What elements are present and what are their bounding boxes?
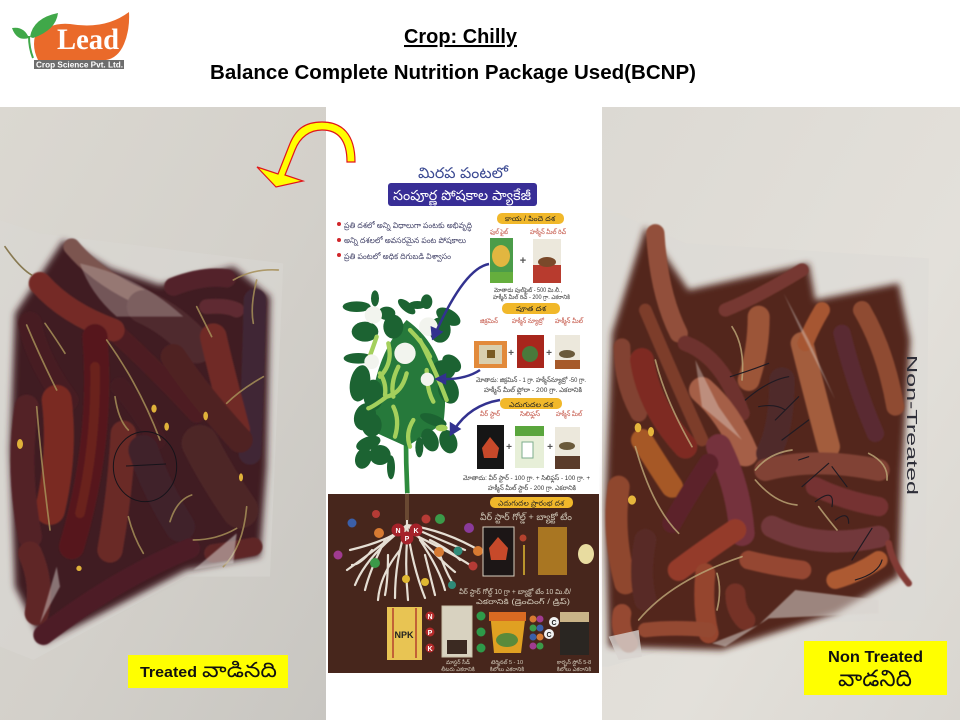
orange-red chilly pile xyxy=(605,227,919,660)
stage: vegetative products: సిలిఫ్లస్ xyxy=(520,410,540,419)
bullet list xyxy=(337,221,472,262)
infographic banner: సంపూర్ణ పోషకాల ప్యాకేజీ xyxy=(393,187,531,206)
infographic banner xyxy=(388,183,537,206)
stage: vegetative products xyxy=(463,398,590,493)
fertiliser products xyxy=(442,606,472,657)
stage: vegetative products: వీర్ స్టార్ xyxy=(480,410,500,419)
chilli plant illustration xyxy=(343,290,465,493)
stage: vegetative products: హక్మీన్ మీల్ xyxy=(556,410,583,419)
marker scribble xyxy=(730,363,882,580)
stage: flowering products: హక్మీన్ మీల్ xyxy=(555,317,584,326)
panel: treated chilly photo xyxy=(0,107,326,720)
stage: flowering products: పూత దశ xyxy=(516,305,547,313)
subtitle: Balance Complete Nutrition Package Used(BCNP) xyxy=(210,62,696,84)
product captions: కిలోలు ఎకరానికి xyxy=(490,666,524,673)
infographic heading: మిరప పంటలో xyxy=(418,164,510,182)
logo: Lead Crop Science xyxy=(12,12,129,70)
stage: flowering products: + xyxy=(546,348,552,359)
label: non treated: Non Treated xyxy=(828,649,923,666)
panel: nutrition package infographic xyxy=(328,162,599,674)
stems xyxy=(635,327,887,620)
soil section: ఎదుగుదల ప్రారంభ దశ xyxy=(498,500,565,508)
stage: fruiting products: ఫుల్ ఫైట్ xyxy=(490,228,509,237)
logo: Lead Crop Science: Crop Science Pvt. Ltd. xyxy=(36,60,123,70)
bullet list: అన్ని దశలలో అవసరమైన పంట పోషకాలు xyxy=(344,236,466,246)
bag print strip xyxy=(712,590,879,647)
stems xyxy=(5,247,278,567)
soil section: C xyxy=(546,632,552,639)
plastic glare xyxy=(695,360,742,440)
stage: fruiting products: హక్మీన్ మీల్ రిచ్ xyxy=(530,228,566,237)
root products xyxy=(483,527,514,576)
label: non treated xyxy=(804,641,947,695)
logo: Lead Crop Science: Lead xyxy=(57,23,119,56)
soil section: K xyxy=(427,646,433,653)
nutrient balls: P xyxy=(405,536,410,543)
stage: flowering products xyxy=(474,303,586,395)
handwritten Non Treated note: Non-Treated xyxy=(903,355,919,495)
stage: vegetative products: + xyxy=(547,442,553,453)
label: treated xyxy=(128,655,288,688)
bullet list: ప్రతి దశలో అన్ని విధాలుగా పంటకు అభివృద్ధి xyxy=(344,221,472,232)
stage: fruiting products: హక్మీన్ మీల్ రిచ్ - 200 గ్రా. ఎకరానికి xyxy=(493,293,570,302)
label: treated: వాడినది xyxy=(202,659,277,682)
dark chilly pile xyxy=(5,240,278,643)
plastic bag xyxy=(602,207,929,667)
stage: flowering products: హక్మీన్ న్యూట్రో xyxy=(512,317,545,326)
soil section: ఎకరానికి (డ్రెంచింగ్ / డ్రిప్) xyxy=(476,598,570,606)
plastic bag xyxy=(0,220,283,660)
stage: fruiting products: కాయ / పిందె దశ xyxy=(505,215,556,223)
seeds xyxy=(17,405,243,571)
seeds xyxy=(628,423,654,505)
NPK bag: NPK xyxy=(394,630,414,640)
soil section: వీర్ స్టార్ గోల్డ్ + బ్యాక్టో టేం xyxy=(480,511,572,524)
product captions: కిలోలు ఎకరానికి xyxy=(557,666,591,673)
stage: fruiting products xyxy=(490,213,570,302)
marker circle xyxy=(113,432,177,502)
arrow: curved yellow arrow pointing to treated sample xyxy=(257,122,355,187)
soil section: వీర్ స్టార్ గోల్డ్ 10 గ్రా + బ్యాక్టో టేం 10 మి.లీ/ xyxy=(459,588,571,597)
product captions: లీటరు ఎకరానికి xyxy=(441,666,475,673)
stage: fruiting products: మోతాదు పుల్‌ఫైట్ - 500 మి.లీ., xyxy=(494,286,562,294)
stage: flowering products: మోతాదు: జిక్రమిన్ - 1 గ్రా. హక్మీన్‌న్యూట్రో -50 గ్రా. xyxy=(476,376,586,385)
stage: vegetative products: + xyxy=(506,442,512,453)
label: non treated: వాడనిది xyxy=(838,665,912,691)
stage: vegetative products: ఎదుగుదల దశ xyxy=(509,401,554,409)
stage: vegetative products: హక్మీన్ మీల్ స్టార్ - 200 గ్రా. ఎకరానికి xyxy=(488,484,577,493)
nutrient balls: N xyxy=(395,528,401,535)
nutrient balls: K xyxy=(413,528,419,535)
soil section: C xyxy=(551,620,557,627)
product captions xyxy=(441,659,591,673)
stage: flowering products: + xyxy=(508,348,514,359)
stage: flowering products: హక్మీన్ మీల్ ఫ్లోరా - 200 గ్రా. ఎకరానికి xyxy=(484,386,583,395)
soil section xyxy=(328,494,599,673)
stage: fruiting products: + xyxy=(520,255,526,267)
nutrient balls xyxy=(334,510,483,589)
stage: flowering products: జిక్రమిన్ xyxy=(480,317,498,325)
label: treated: Treated xyxy=(140,664,197,681)
soil stage label xyxy=(490,497,573,508)
panel: non treated chilly photo xyxy=(128,107,960,720)
soil section: P xyxy=(428,630,433,637)
NPK bag xyxy=(387,607,422,660)
bullet list: ప్రతి పంటలో అధిక దిగుబడి విశ్వాసం xyxy=(344,252,451,262)
product captions: మాస్టర్ సీడ్ xyxy=(446,659,470,667)
soil section: N xyxy=(427,614,433,621)
arrows to plant stages xyxy=(432,264,500,434)
product captions: టెర్మినల్ 5 - 10 xyxy=(491,659,523,667)
roots xyxy=(347,494,482,600)
plastic glare xyxy=(80,263,183,317)
title: Crop: Chilly xyxy=(404,25,518,48)
stage: vegetative products: మోతాదు: వీర్ స్టార్ - 100 గ్రా. + సిలిఫ్లస్ - 100 గ్రా. + xyxy=(463,474,590,483)
product captions: కార్బన్ స్టోన్ 5-8 xyxy=(557,659,591,667)
